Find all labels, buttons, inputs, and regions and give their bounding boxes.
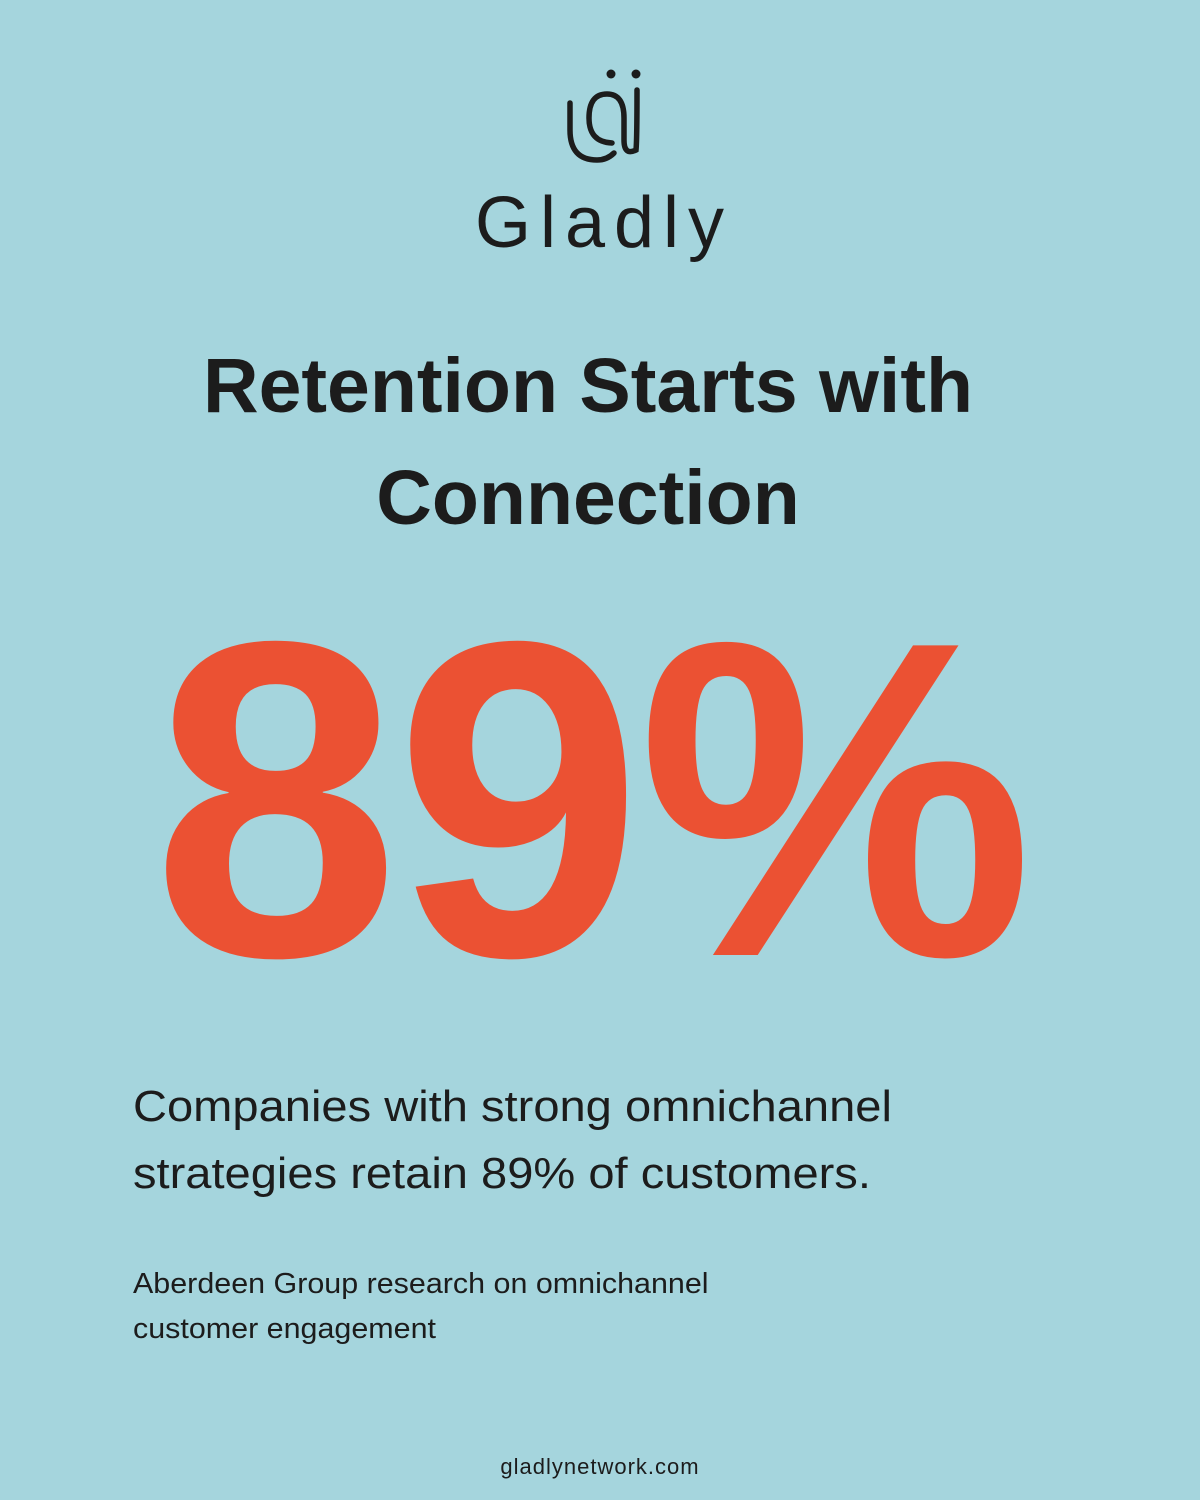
description [133, 1082, 892, 1198]
source: customer engagement [133, 1313, 436, 1345]
description: Companies with strong omnichannel [133, 1082, 892, 1131]
logo wordmark: Gladly [475, 183, 733, 263]
footer url: gladlynetwork.com [500, 1454, 700, 1479]
title: Connection [376, 455, 800, 541]
title: Retention Starts with [203, 343, 973, 429]
source [133, 1268, 709, 1345]
logo icon [567, 70, 640, 163]
description: strategies retain 89% of customers. [133, 1149, 871, 1198]
title [203, 343, 973, 541]
source: Aberdeen Group research on omnichannel [133, 1268, 709, 1300]
big stat: 89% [152, 549, 1029, 1051]
